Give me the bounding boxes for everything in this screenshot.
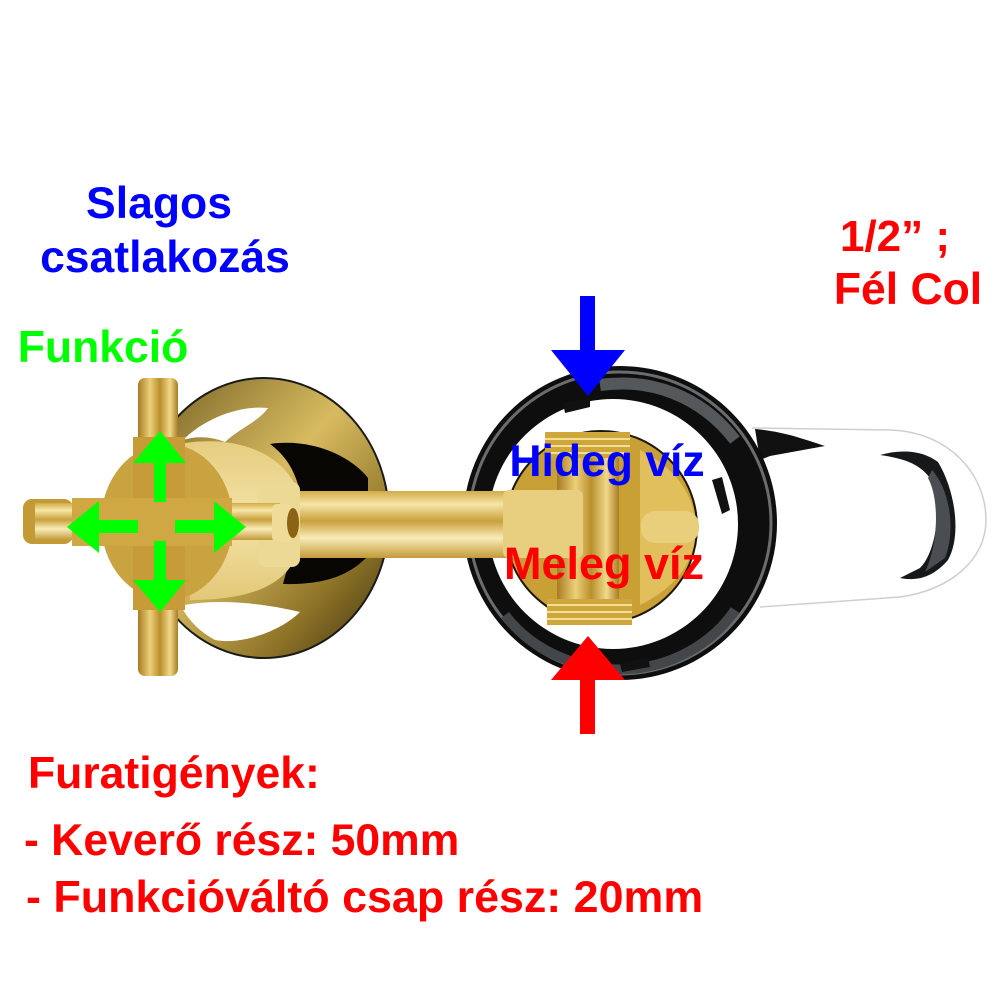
label: Hideg víz: Hideg víz: [509, 437, 705, 486]
title: csatlakozás: csatlakozás: [40, 233, 290, 282]
blue arrow: cold water: [551, 296, 625, 396]
text: function valve part: - Funkcióváltó csap rész: 20mm: [26, 872, 703, 922]
text: mixer part: - Keverő rész: 50mm: [24, 816, 459, 865]
label: Meleg víz: Meleg víz: [504, 538, 704, 589]
title: Slagos: Slagos: [86, 179, 232, 228]
label: Fél Col: Fél Col: [834, 265, 982, 314]
escutcheon plate: [139, 378, 389, 658]
green four way arrows: [67, 431, 246, 612]
label: size: 1/2” ;: [840, 212, 950, 261]
heading: drilling requirements: Furatigények:: [28, 749, 320, 798]
pipe collar: [258, 482, 300, 567]
round brass flange: [101, 444, 233, 600]
threaded outlets: [545, 432, 632, 625]
cross vertical hose fitting: [133, 378, 185, 676]
long brass pipe: [296, 491, 511, 558]
image: function valve: [23, 378, 511, 676]
cross horizontal hose fitting: [23, 498, 299, 546]
red arrow: hot water: [551, 636, 625, 734]
image: mixer handle: [752, 428, 986, 607]
image: mixer ring: [455, 366, 777, 680]
brass mixer disc: [505, 431, 697, 623]
valve body cylinder: [185, 441, 298, 600]
pipe and junction: [455, 490, 583, 558]
label: Funkció: Funkció: [18, 323, 188, 372]
mixer back lug: [641, 511, 699, 543]
